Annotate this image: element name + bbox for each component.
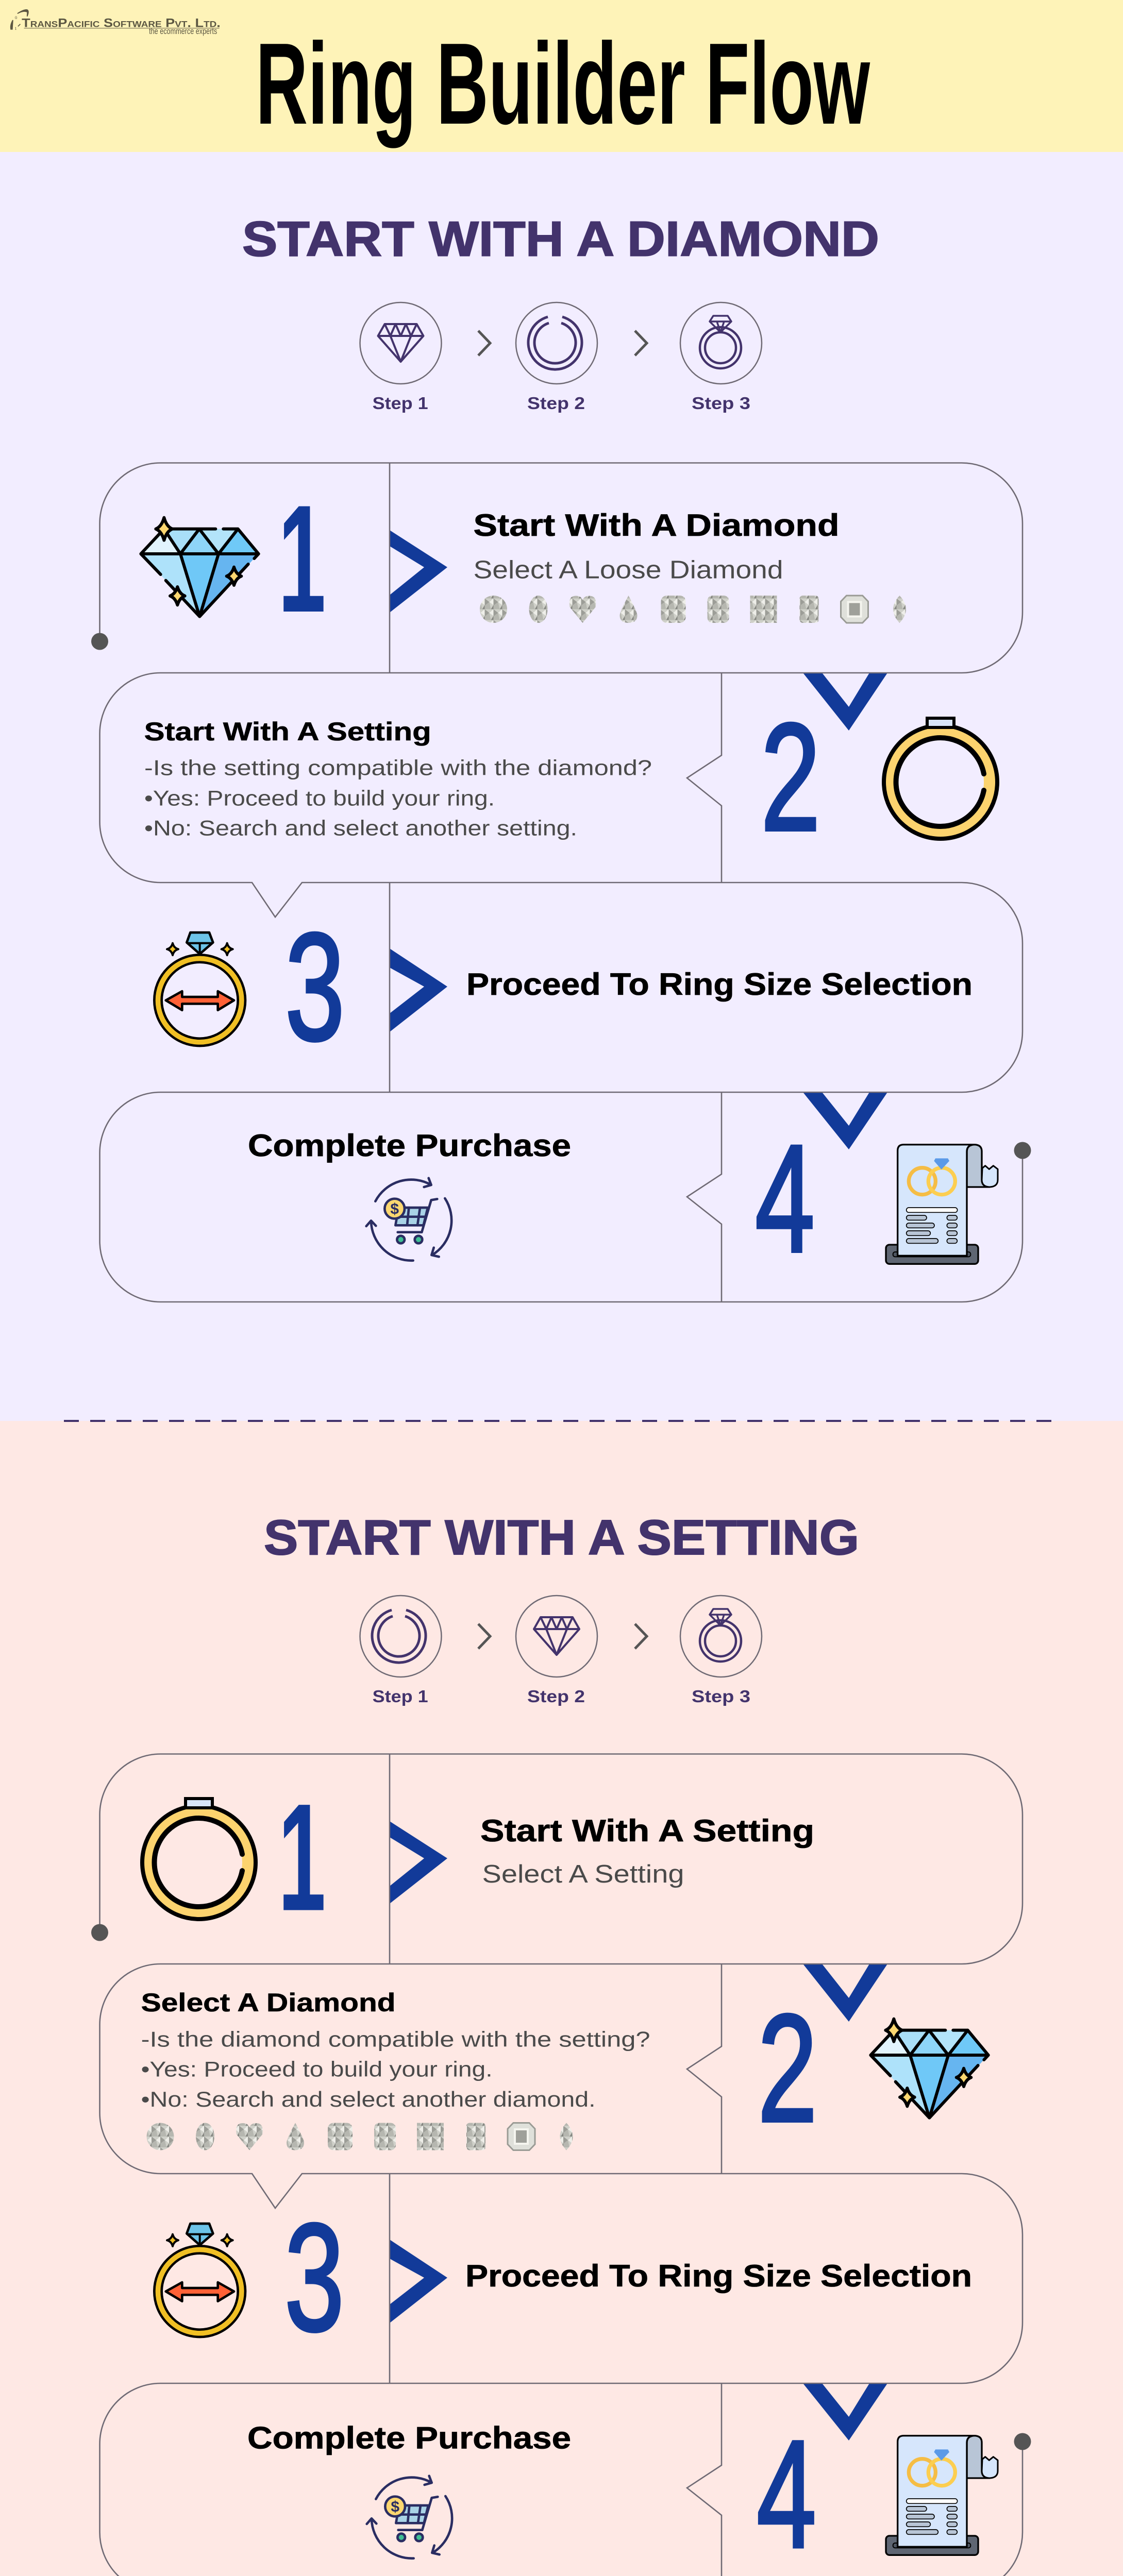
text: select a diamond: Select A Diamond — [141, 1988, 396, 2017]
step 4 card — [247, 2409, 998, 2576]
step 1 — [360, 302, 441, 413]
flow frame — [91, 1754, 1031, 2576]
text: complete purchase: Complete Purchase — [248, 1128, 571, 1163]
icon: receipt — [886, 2436, 998, 2555]
text: diamond checks: •No: Search and select another diamond. — [141, 2087, 596, 2111]
text: complete purchase: Complete Purchase — [247, 2421, 571, 2455]
icon: ring size — [154, 933, 245, 1046]
step 2 — [516, 1596, 597, 1706]
flow frame — [91, 463, 1031, 1302]
arrow — [635, 331, 647, 355]
number 2: 2 — [761, 692, 820, 863]
icon: receipt — [886, 1145, 998, 1264]
icon: diamond — [141, 518, 259, 617]
panel: start with a setting background — [0, 1421, 1123, 2576]
step 2 card — [141, 1983, 988, 2154]
arrow — [478, 331, 490, 355]
step 2: Step 2 — [527, 1687, 585, 1706]
step 1 — [360, 1596, 441, 1706]
step indicator — [360, 302, 762, 413]
number 3: 3 — [285, 902, 345, 1073]
logo: header: 0 — [15, 15, 18, 20]
panel: title banner — [0, 0, 1123, 152]
arrow — [635, 1624, 647, 1649]
number 1: 1 — [278, 1772, 326, 1943]
step 1: Step 1 — [373, 394, 428, 413]
arrows: blue chevrons — [390, 1821, 887, 2441]
heading: START WITH A DIAMOND — [242, 211, 879, 267]
section: start with a diamond — [91, 211, 1031, 1302]
icon: diamond — [870, 2019, 988, 2118]
icon: ring size — [154, 2224, 245, 2337]
text: select a setting: Select A Setting — [482, 1860, 684, 1888]
section divider — [64, 1420, 1061, 1422]
text: diamond checks — [141, 2027, 650, 2111]
step 3 card — [154, 902, 973, 1073]
text: start with a setting: Start With A Setting — [144, 717, 431, 746]
text: diamond checks: -Is the diamond compatible with the setting? — [141, 2027, 650, 2052]
number 1: 1 — [278, 473, 326, 645]
step 3 — [680, 302, 762, 413]
icon: ring — [142, 1799, 256, 1919]
logo: header — [11, 10, 221, 36]
number 4: 4 — [757, 2409, 816, 2576]
arrows: blue chevrons — [390, 530, 887, 1149]
step 3 card — [154, 2192, 972, 2363]
number 4: 4 — [755, 1113, 815, 1284]
text: start with a diamond: Start With A Diamond — [473, 508, 839, 543]
step 3: Step 3 — [692, 394, 750, 413]
step 2: Step 2 — [527, 394, 585, 413]
text: diamond checks: •Yes: Proceed to build your ring. — [141, 2057, 493, 2081]
arrow — [478, 1624, 490, 1649]
text: select a loose diamond: Select A Loose Diamond — [473, 556, 783, 584]
step 2 — [516, 302, 597, 413]
icon: cart — [367, 2476, 452, 2558]
panel: start with a diamond background — [0, 152, 1123, 1421]
diamond shapes — [480, 596, 906, 623]
step 3: Step 3 — [692, 1687, 750, 1706]
section: start with a setting — [64, 1421, 1061, 2576]
text: setting checks: •Yes: Proceed to build your ring. — [144, 786, 495, 810]
diamond shapes — [146, 2123, 573, 2150]
icon: ring — [884, 718, 997, 839]
icon: cart — [366, 1178, 451, 1261]
text: setting checks — [144, 756, 652, 840]
step 1 card — [141, 473, 906, 645]
heading: START WITH A SETTING — [264, 1510, 859, 1565]
text: setting checks: -Is the setting compatible with the diamond? — [144, 756, 652, 780]
logo: header: the ecommerce experts — [149, 26, 217, 36]
step 4 card — [248, 1113, 998, 1284]
step 1: Step 1 — [373, 1687, 428, 1706]
text: ring size: Proceed To Ring Size Selection — [466, 967, 973, 1002]
step 1 card — [142, 1772, 814, 1943]
text: start with a setting: Start With A Setting — [480, 1814, 814, 1848]
step indicator — [360, 1596, 762, 1706]
logo: header: 1 — [14, 26, 17, 31]
text: ring size: Proceed To Ring Size Selection — [465, 2259, 972, 2293]
number 2: 2 — [758, 1983, 817, 2154]
step 2 card — [144, 692, 997, 863]
logo: header: TransPacific Software Pvt. Ltd. — [22, 16, 221, 30]
number 3: 3 — [284, 2192, 344, 2363]
text: setting checks: •No: Search and select another setting. — [144, 816, 577, 840]
step 3 — [680, 1596, 762, 1706]
